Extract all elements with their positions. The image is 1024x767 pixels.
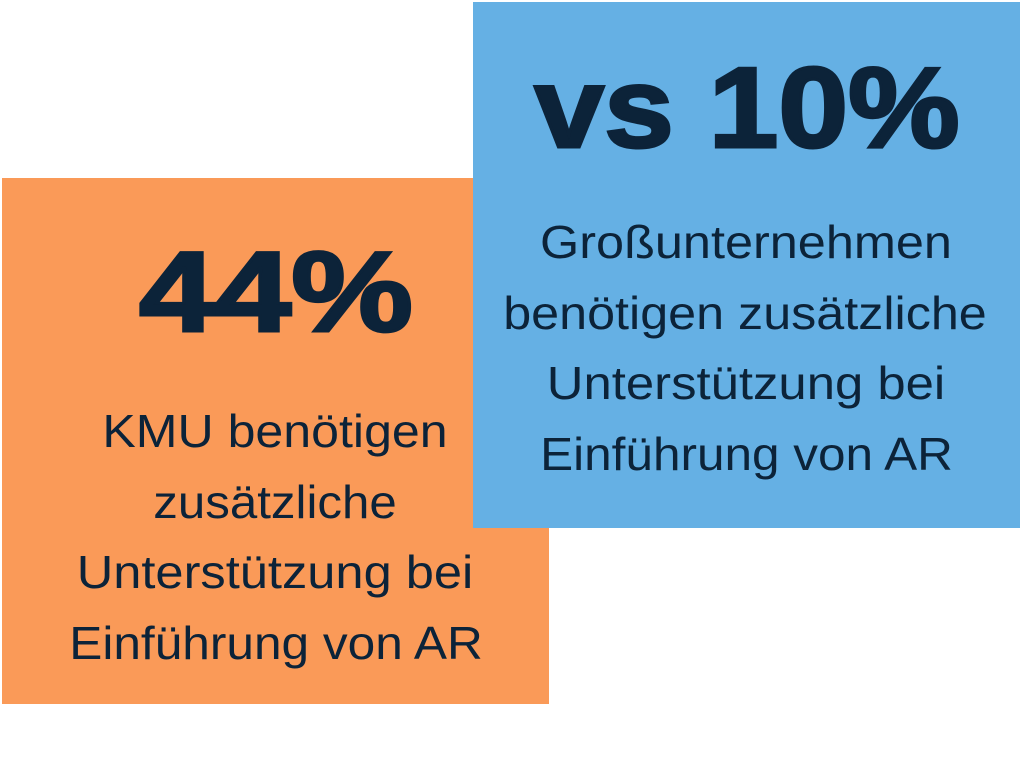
text: KMU description: zusätzliche xyxy=(153,476,397,528)
text: Großunternehmen description: benötigen zusätzliche xyxy=(503,287,987,339)
text: Großunternehmen description xyxy=(503,216,987,480)
stat: vs 10%: vs 10% xyxy=(534,45,960,172)
panel: blue Großunternehmen xyxy=(473,2,1020,528)
text: KMU description: Unterstützung bei xyxy=(77,546,473,598)
stat: 44%: 44% xyxy=(139,229,413,356)
text: KMU description xyxy=(69,405,483,669)
text: Großunternehmen description: Einführung von AR xyxy=(540,428,953,480)
text: Großunternehmen description: Unterstützung bei xyxy=(547,357,945,409)
panel: orange KMU xyxy=(2,178,549,704)
text: Großunternehmen description: Großunternehmen xyxy=(540,216,952,268)
text: KMU description: Einführung von AR xyxy=(69,617,483,669)
text: KMU description: KMU benötigen xyxy=(102,405,448,457)
